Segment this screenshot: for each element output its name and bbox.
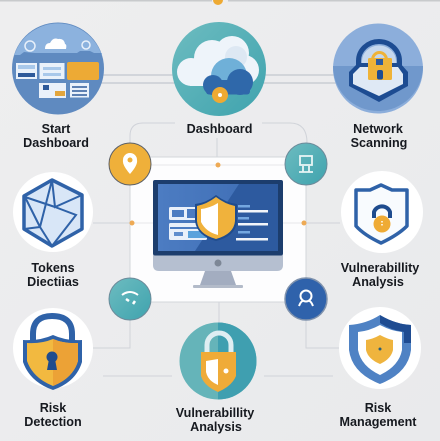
label: Start <box>42 122 70 136</box>
icon: wifi badge <box>109 278 151 320</box>
panel: risk detection <box>13 308 93 429</box>
connector lines <box>93 75 340 376</box>
icon: user search badge <box>285 278 327 320</box>
icon: location badge <box>109 143 151 185</box>
central panel <box>130 157 306 302</box>
label: Analysis <box>190 420 242 434</box>
icon: hexagon token <box>13 172 93 252</box>
icon: dashboard circle <box>12 22 104 114</box>
icon: lock shield <box>13 308 93 390</box>
label: Vulnerabillity <box>341 261 419 275</box>
label: Scanning <box>351 136 407 150</box>
panel: network scanning <box>333 24 423 150</box>
top marker dot <box>213 0 223 5</box>
icon: shield with lock <box>341 171 423 253</box>
monitor illustration <box>153 180 283 288</box>
shield <box>195 195 237 241</box>
panel: tokens <box>13 172 93 289</box>
icon: teal padlock <box>180 322 256 400</box>
label: Management <box>340 415 417 429</box>
icon: cloud circle <box>172 22 266 116</box>
icon: padlock shield circle <box>333 24 423 114</box>
label: Risk <box>40 401 66 415</box>
label: Tokens <box>31 261 75 275</box>
panel: vulnerability analysis bottom <box>176 322 256 434</box>
label: Analysis <box>352 275 404 289</box>
panel: start dashboard <box>12 22 104 150</box>
label: Risk <box>365 401 391 415</box>
panel: dashboard <box>172 22 266 136</box>
label: Diectiias <box>27 275 79 289</box>
label: Dashboard <box>187 122 252 136</box>
icon: shield <box>339 307 421 389</box>
label: Vulnerabillity <box>176 406 254 420</box>
icon: device badge <box>285 143 327 185</box>
label: Network <box>353 122 403 136</box>
panel: vulnerability analysis right <box>341 171 423 289</box>
panel: risk management <box>339 307 421 429</box>
label: Detection <box>24 415 82 429</box>
label: Dashboard <box>23 136 89 150</box>
